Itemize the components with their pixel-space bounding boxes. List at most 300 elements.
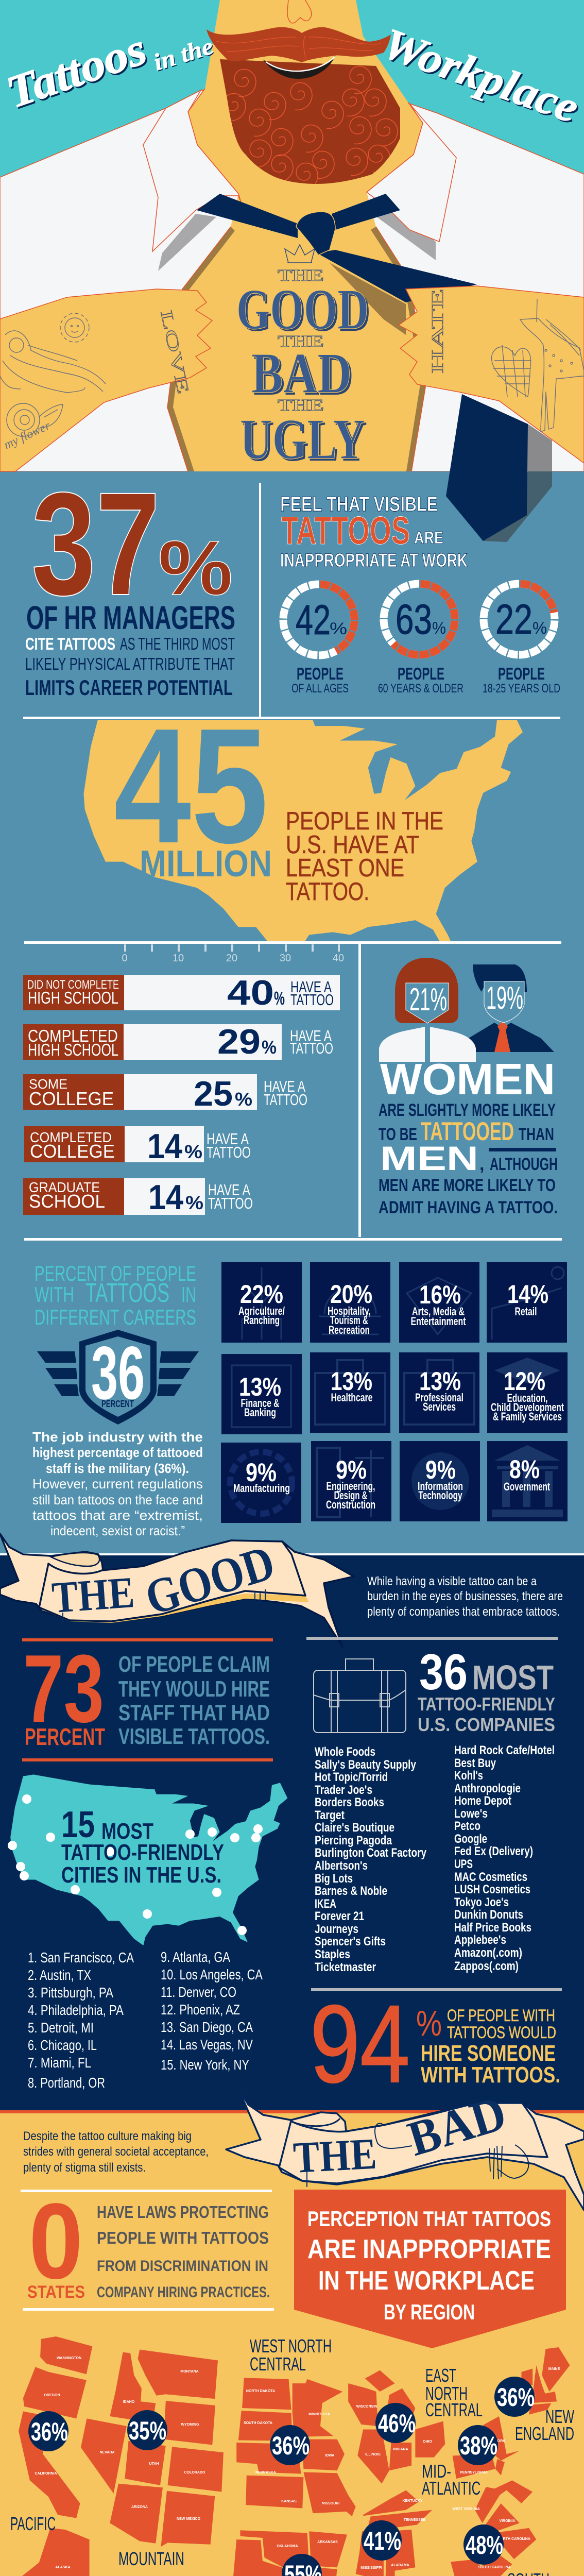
list: companies column 2: Dunkin Donuts xyxy=(454,1908,523,1922)
tile: education: 12% xyxy=(504,1367,545,1396)
state names: COLORADO xyxy=(184,2471,205,2475)
region labels: CENTRAL xyxy=(425,2399,483,2420)
list: companies column 1: IKEA xyxy=(315,1897,336,1911)
right arm xyxy=(399,286,584,463)
map: 15 tattoo friendly cities xyxy=(8,1774,287,1945)
list: cities: 7. Miami, FL xyxy=(28,2055,91,2071)
donut: 63 percent: 60 YEARS & OLDER xyxy=(378,682,463,696)
bar: did not complete high school: DID NOT COMPLETE xyxy=(27,978,119,992)
tile: engineering: Engineering, xyxy=(327,1480,375,1493)
tattoo: mermaid xyxy=(0,331,106,393)
state names: NEVADA xyxy=(99,2451,115,2454)
region labels: MID- xyxy=(422,2461,451,2482)
state names: MAINE xyxy=(548,2367,560,2371)
list: cities: 1. San Francisco, CA xyxy=(28,1950,134,1965)
bar: completed high school xyxy=(23,1022,333,1061)
chest tattoo: the good the bad the ugly: BAD xyxy=(253,344,354,408)
list: cities: 14. Las Vegas, NV xyxy=(161,2037,253,2053)
chest tattoo: the good the bad the ugly: BAD xyxy=(251,342,352,405)
list: companies column 1: Target xyxy=(315,1808,345,1822)
state names: WYOMING xyxy=(181,2423,199,2427)
icon: military shield 36 percent xyxy=(37,1330,199,1425)
banner: perception by region: BY REGION xyxy=(384,2300,475,2324)
tile: information technology: 9% xyxy=(425,1455,456,1484)
nose xyxy=(287,0,312,23)
list: companies column 1: Borders Books xyxy=(315,1795,384,1809)
state names: WEST VIRGINIA xyxy=(452,2507,480,2511)
tattoo: brick heart xyxy=(492,345,531,397)
bar: completed college: COLLEGE xyxy=(30,1141,115,1162)
heading: 36 most tattoo friendly companies xyxy=(418,1643,555,1735)
title: in the xyxy=(151,33,217,77)
text: the bad intro: plenty of stigma still exists. xyxy=(23,2161,146,2175)
map: 45 million people: MILLION xyxy=(140,843,272,885)
stat: 0 states xyxy=(27,2181,270,2302)
tie lower blade xyxy=(446,394,528,541)
donut: 22 percent: 22 xyxy=(495,596,533,643)
stat: 73 percent: STAFF THAT HAD xyxy=(118,1700,270,1725)
tile: information technology xyxy=(400,1441,480,1521)
banner: the bad xyxy=(226,2085,584,2210)
donut: 63 percent: PEOPLE xyxy=(398,664,444,683)
region labels: WEST NORTH xyxy=(250,2335,332,2357)
list: cities: 3. Pittsburgh, PA xyxy=(28,1985,113,2001)
tile: engineering: Design & xyxy=(334,1489,368,1502)
bar: did not complete high school: HAVE A xyxy=(290,978,332,996)
tile: professional services xyxy=(399,1352,479,1433)
stat: 37 percent of HR managers xyxy=(25,462,235,700)
region labels: MOUNTAIN xyxy=(118,2548,184,2569)
tile: healthcare: Healthcare xyxy=(331,1391,373,1404)
tie xyxy=(197,194,477,302)
tile: arts: 16% xyxy=(419,1280,461,1309)
stat: 0 states: COMPANY HIRING PRACTICES. xyxy=(97,2284,270,2301)
list: companies column 1: Burlington Coat Factory xyxy=(315,1846,427,1860)
tile: government: 8% xyxy=(509,1455,540,1484)
donut: 63 percent xyxy=(378,584,463,696)
face and neck xyxy=(167,0,426,471)
state names: OREGON xyxy=(44,2394,60,2397)
stat: 94 percent: % xyxy=(416,2003,442,2043)
text: women vs men: , xyxy=(479,1155,484,1174)
bar: completed college: 14 xyxy=(147,1127,182,1166)
list: cities: 15. New York, NY xyxy=(161,2057,249,2073)
list: companies column 2: Anthropologie xyxy=(454,1782,521,1795)
state names: ILLINOIS xyxy=(365,2453,381,2456)
heading: feel that visible tattoos: INAPPROPRIATE AT WORK xyxy=(280,550,468,571)
list: cities: 11. Denver, CO xyxy=(161,1984,236,2000)
list: companies column 1: Whole Foods xyxy=(315,1745,375,1759)
state names: IDAHO xyxy=(123,2400,135,2404)
list: companies column 1: Sally's Beauty Supply xyxy=(315,1758,417,1772)
tile: engineering: Construction xyxy=(326,1498,375,1511)
tile: retail xyxy=(487,1262,567,1343)
grid: career tiles xyxy=(221,1262,568,1523)
chart axis: 0 xyxy=(122,953,128,964)
banner: perception by region: IN THE WORKPLACE xyxy=(318,2266,535,2296)
icon: man 19 percent: 19% xyxy=(486,980,523,1016)
list: companies column 1: Forever 21 xyxy=(315,1909,364,1923)
stat: 73 percent: 73 xyxy=(23,1635,104,1742)
map: states by region xyxy=(0,2335,574,2576)
heading: percent in careers: PERCENT OF PEOPLE xyxy=(35,1261,196,1285)
state names xyxy=(35,2357,560,2576)
list: cities: 10. Los Angeles, CA xyxy=(161,1967,263,1982)
tile: government xyxy=(487,1441,568,1521)
bar: graduate school: TATTOO xyxy=(208,1194,253,1212)
illustration: tattooed man xyxy=(0,0,584,542)
tile: engineering xyxy=(311,1441,391,1521)
stat: 37 percent of HR managers: LIKELY PHYSICAL ATTRIBUTE THAT xyxy=(25,654,235,673)
tile: manufacturing xyxy=(221,1443,301,1523)
text: military paragraph: still ban tattoos on the face and xyxy=(32,1492,203,1507)
list: companies column 2: Best Buy xyxy=(454,1756,496,1770)
state names: PENNSYLVANIA xyxy=(460,2471,488,2475)
city dots xyxy=(8,1794,263,1935)
text: the good intro xyxy=(367,1574,563,1619)
background: top sky xyxy=(0,0,584,216)
title: in the xyxy=(150,32,216,76)
text: military paragraph: tattoos that are “extremist, xyxy=(32,1507,203,1523)
donut: 42 percent: 42 xyxy=(296,597,331,643)
bar: some college xyxy=(23,1074,307,1113)
tile: manufacturing: Manufacturing xyxy=(233,1482,290,1495)
state names: SOUTH CAROLINA xyxy=(478,2566,511,2569)
bar: some college: 25 xyxy=(194,1074,233,1113)
map: 15 tattoo friendly cities: 15 xyxy=(61,1804,95,1845)
region percentages xyxy=(31,2383,535,2576)
bar: completed college: HAVE A xyxy=(207,1130,249,1148)
list: cities: 12. Phoenix, AZ xyxy=(161,2002,240,2018)
list: companies column 1: Hot Topic/Torrid xyxy=(315,1770,388,1784)
list: companies column 1: Claire's Boutique xyxy=(315,1821,394,1835)
stat: 37 percent of HR managers: 37 xyxy=(31,462,160,626)
panel: the good background xyxy=(0,1554,584,2111)
chest tattoo: the good the bad the ugly: THE xyxy=(278,396,324,414)
stat: 0 states: HAVE LAWS PROTECTING xyxy=(97,2202,269,2222)
tile: information technology: Technology xyxy=(418,1489,462,1502)
bar: completed college: COMPLETED xyxy=(30,1129,112,1145)
list: companies column 1: Journeys xyxy=(315,1922,358,1936)
state names: WASHINGTON xyxy=(57,2357,81,2360)
state names: CALIFORNIA xyxy=(35,2472,57,2476)
stat: 73 percent: PERCENT xyxy=(25,1723,105,1750)
region circles xyxy=(28,2377,535,2576)
tile: retail: 14% xyxy=(507,1280,548,1309)
chest tattoo: the good the bad the ugly: UGLY xyxy=(240,408,365,471)
text: the good intro: While having a visible tattoo can be a xyxy=(367,1574,537,1588)
bar: completed college: TATTOO xyxy=(207,1143,251,1161)
stat: 37 percent of HR managers: % xyxy=(158,524,233,611)
region percentages: 38% xyxy=(460,2431,497,2460)
map: 45 million people: TATTOO. xyxy=(286,878,369,906)
state names: INDIANA xyxy=(393,2448,408,2451)
list: cities: 8. Portland, OR xyxy=(28,2075,105,2091)
state names: IOWA xyxy=(325,2454,334,2458)
tattoo: LOVE: LOVE xyxy=(157,309,193,396)
tile: professional services: Professional xyxy=(415,1391,463,1404)
bar: completed high school: TATTOO xyxy=(290,1039,333,1057)
state names: ARIZONA xyxy=(131,2505,148,2509)
bar: completed high school: HIGH SCHOOL xyxy=(28,1040,118,1059)
title: Workplace xyxy=(377,19,584,132)
list: companies column 2: Lowe's xyxy=(454,1807,488,1821)
list: companies column 2: UPS xyxy=(454,1857,473,1871)
map: 15 tattoo friendly cities: MOST xyxy=(101,1819,153,1844)
state names: ALABAMA xyxy=(391,2564,409,2567)
region percentages: 36% xyxy=(272,2431,310,2460)
bar: completed high school: % xyxy=(262,1037,277,1058)
region percentages: 35% xyxy=(129,2416,166,2445)
text: military paragraph: However, current regulations xyxy=(32,1476,203,1492)
bar: did not complete high school: 40 xyxy=(227,973,274,1012)
stat: 0 states: 0 xyxy=(29,2181,83,2301)
state names: OKLAHOMA xyxy=(277,2545,298,2548)
bar: graduate school: HAVE A xyxy=(208,1181,250,1199)
mouth xyxy=(263,56,335,79)
heading: 36 most tattoo friendly companies: TATTOO-FRIENDLY xyxy=(418,1693,555,1715)
tile: hospitality: Tourism & xyxy=(330,1314,368,1327)
bar: completed college xyxy=(24,1126,251,1166)
map: 45 million people: LEAST ONE xyxy=(286,854,404,882)
title: Tattoos xyxy=(1,24,152,118)
beard curls xyxy=(224,66,398,190)
state names: TENNESSEE xyxy=(404,2518,426,2522)
tie knot xyxy=(296,212,335,255)
map: 15 tattoo friendly cities: TATTOO-FRIENDLY xyxy=(61,1840,224,1865)
text: women vs men: WOMEN xyxy=(380,1055,555,1104)
stat: 37 percent of HR managers: OF HR MANAGERS xyxy=(26,599,235,636)
list: companies column 2: Home Depot xyxy=(454,1794,511,1808)
tile: agriculture: Agriculture/ xyxy=(238,1304,285,1317)
bar: some college: HAVE A xyxy=(264,1077,305,1095)
tile: education xyxy=(487,1352,568,1433)
list: companies column 1: Ticketmaster xyxy=(315,1960,376,1974)
tile: hospitality: Hospitality, xyxy=(328,1304,371,1317)
icon: military shield 36 percent: PERCENT xyxy=(101,1399,134,1409)
list: companies column 2: Amazon(.com) xyxy=(454,1946,522,1960)
tile: agriculture: Ranching xyxy=(244,1314,280,1327)
list: companies column 2: Petco xyxy=(454,1819,480,1833)
bar: some college: % xyxy=(235,1089,252,1110)
bar: some college: TATTOO xyxy=(264,1091,307,1109)
region labels: CENTRAL xyxy=(250,2353,306,2375)
text: military paragraph: highest percentage of tattooed xyxy=(32,1445,203,1460)
chest tattoo: the good the bad the ugly: GOOD xyxy=(238,280,371,344)
text: the bad intro xyxy=(23,2129,209,2175)
bar: some college: SOME xyxy=(29,1076,67,1092)
stat: 94 percent: 94 xyxy=(310,1982,410,2106)
stat: 73 percent: VISIBLE TATTOOS. xyxy=(118,1724,270,1749)
chart axis: 30 xyxy=(280,953,291,964)
bar: did not complete high school: HIGH SCHOOL xyxy=(28,988,118,1007)
collar left xyxy=(143,90,242,251)
bar: graduate school: % xyxy=(185,1192,203,1213)
tile: hospitality xyxy=(310,1262,390,1343)
heading: percent in careers: TATTOOS xyxy=(85,1278,169,1308)
chart axis xyxy=(122,944,344,964)
chart axis: 10 xyxy=(173,953,184,964)
list: companies column 2: Google xyxy=(454,1832,487,1846)
state shapes xyxy=(0,2336,570,2576)
region labels: EAST xyxy=(425,2365,456,2386)
state names: ARKANSAS xyxy=(317,2540,338,2544)
stat: 94 percent: OF PEOPLE WITH xyxy=(447,2006,555,2025)
region labels xyxy=(10,2335,574,2576)
chart axis: 20 xyxy=(226,953,237,964)
torso shading xyxy=(167,227,426,471)
tile: agriculture: 22% xyxy=(240,1280,283,1309)
text: women vs men: TO BE xyxy=(379,1125,417,1144)
donut: 42 percent xyxy=(283,584,354,696)
list: companies column 2: Half Price Books xyxy=(454,1921,531,1935)
heading: percent in careers: DIFFERENT CAREERS xyxy=(35,1305,196,1329)
map: 45 million people: PEOPLE IN THE xyxy=(286,807,443,835)
banner: the good xyxy=(0,1534,354,1647)
tattoo: crown xyxy=(285,245,315,263)
tile: education: Education, xyxy=(507,1392,548,1404)
list: companies column 1: Barnes & Noble xyxy=(315,1884,387,1898)
chest tattoo: the good the bad the ugly: UGLY xyxy=(242,410,367,473)
text: women vs men: TATTOOED xyxy=(421,1117,514,1146)
bar: graduate school: 14 xyxy=(148,1178,183,1217)
panel: blue stats background xyxy=(0,471,584,1554)
bar: graduate school: SCHOOL xyxy=(29,1191,105,1212)
region percentages: 41% xyxy=(364,2527,401,2555)
bar: did not complete high school: TATTOO xyxy=(290,991,334,1009)
list: companies column 1: Big Lots xyxy=(315,1872,353,1886)
map: 45 million people: 45 xyxy=(114,694,268,877)
list: companies column 2: LUSH Cosmetics xyxy=(454,1883,530,1896)
chest tattoo: the good the bad the ugly: THE xyxy=(278,332,324,350)
list: cities: 5. Detroit, MI xyxy=(28,2020,94,2036)
tile: engineering: 9% xyxy=(336,1455,367,1484)
bar: completed high school: COMPLETED xyxy=(28,1026,118,1045)
state names: MINNESOTA xyxy=(308,2413,330,2416)
heading: percent in careers: IN xyxy=(181,1282,196,1307)
tattoo: rose xyxy=(7,403,63,436)
region percentages: 36% xyxy=(31,2417,68,2446)
heading: feel that visible tattoos: ARE xyxy=(414,528,443,547)
tile: government: Government xyxy=(504,1480,550,1493)
region labels: NORTH xyxy=(425,2383,468,2404)
donut: 63 percent: 63 xyxy=(396,596,432,643)
tattoo: unicorn xyxy=(520,299,584,432)
donut: 22 percent xyxy=(483,584,560,696)
list: cities: 13. San Diego, CA xyxy=(161,2019,253,2035)
tile: hospitality: Recreation xyxy=(329,1324,370,1336)
list: companies column 1: Albertson's xyxy=(315,1859,368,1873)
tie lower blade shadow xyxy=(483,424,552,542)
list: companies column 2: Fed Ex (Delivery) xyxy=(454,1844,533,1858)
list: companies column 1: Trader Joe's xyxy=(315,1783,372,1797)
stat: 94 percent: TATTOOS WOULD xyxy=(447,2023,556,2042)
donut: 22 percent: PEOPLE xyxy=(498,664,545,683)
beard xyxy=(220,59,400,184)
banner: the bad: THE xyxy=(292,2129,378,2182)
list: companies column 2: Tokyo Joe's xyxy=(454,1895,509,1909)
tile: finance: 13% xyxy=(239,1372,281,1401)
list: cities: 2. Austin, TX xyxy=(28,1967,91,1983)
tile: information technology: Information xyxy=(418,1480,463,1493)
heading: 36 most tattoo friendly companies: 36 xyxy=(419,1643,468,1700)
state names: KANSAS xyxy=(281,2500,297,2503)
bar: completed college: % xyxy=(184,1141,202,1162)
list: companies column 1: Staples xyxy=(315,1947,350,1961)
tattoo: HATE: HATE xyxy=(428,289,446,374)
text: the bad intro: strides with general societal acceptance, xyxy=(23,2145,209,2159)
mustache xyxy=(207,27,391,62)
donut: 42 percent: % xyxy=(330,619,347,638)
state names: SOUTH DAKOTA xyxy=(244,2421,272,2425)
chest tattoo: the good the bad the ugly: GOOD xyxy=(236,278,369,342)
tile: agriculture xyxy=(221,1262,302,1343)
tile: professional services: Services xyxy=(423,1400,456,1413)
state names: NEBRASKA xyxy=(255,2471,276,2475)
state names: KENTUCKY xyxy=(403,2499,423,2503)
title: Workplace xyxy=(379,21,584,134)
neck outline xyxy=(188,89,423,194)
heading: feel that visible tattoos xyxy=(280,493,468,571)
background: shirt xyxy=(0,90,584,471)
stat: 37 percent of HR managers: CITE TATTOOS xyxy=(25,634,115,653)
state names: VIRGINIA xyxy=(499,2519,516,2523)
state names: UTAH xyxy=(149,2462,159,2466)
bar: completed high school: HAVE A xyxy=(290,1027,332,1045)
tile: retail: Retail xyxy=(515,1305,537,1318)
region percentages: 36% xyxy=(497,2383,535,2412)
tie shadow on torso xyxy=(330,263,406,335)
stat: 37 percent of HR managers: AS THE THIRD MOST xyxy=(120,634,235,653)
state names: ALASKA xyxy=(55,2566,71,2569)
bar: did not complete high school: % xyxy=(274,988,285,1009)
state names: NORTH DAKOTA xyxy=(246,2389,275,2393)
region labels: ATLANTIC xyxy=(422,2478,480,2499)
list: cities: 6. Chicago, IL xyxy=(28,2037,97,2053)
tile: arts: Arts, Media & xyxy=(412,1305,465,1318)
list: companies column 2: Zappos(.com) xyxy=(454,1959,519,1973)
icon: military shield 36 percent: 36 xyxy=(91,1331,145,1415)
list: companies column 2: Kohl's xyxy=(454,1769,483,1783)
donut: 63 percent: % xyxy=(432,619,446,637)
state names: NEW MEXICO xyxy=(177,2517,200,2521)
region percentages: 48% xyxy=(466,2531,503,2560)
tile: arts: Entertainment xyxy=(411,1315,466,1328)
list: companies column 2: Applebee's xyxy=(454,1933,506,1947)
stat: 0 states: FROM DISCRIMINATION IN xyxy=(97,2258,268,2275)
bar: did not complete high school xyxy=(23,973,340,1012)
text: women vs men: MEN xyxy=(380,1139,478,1177)
map: 15 tattoo friendly cities: CITIES IN THE U.S. xyxy=(61,1862,221,1888)
text: women vs men xyxy=(379,1055,558,1217)
icon: briefcase xyxy=(314,1659,406,1733)
tattoo: my flower: my flower xyxy=(2,419,53,452)
map: 45 million people xyxy=(83,720,523,941)
banner: perception by region xyxy=(294,2190,566,2348)
bar: graduate school xyxy=(23,1178,253,1217)
heading: percent in careers: WITH xyxy=(35,1282,74,1307)
bar: completed high school: 29 xyxy=(217,1022,261,1061)
chest tattoo: the good the bad the ugly xyxy=(236,266,371,473)
text: military paragraph: indecent, sexist or racist.” xyxy=(50,1523,185,1538)
collar shadows xyxy=(158,210,436,271)
text: women vs men: THAN xyxy=(519,1125,554,1144)
tie lower blade shadow over panel xyxy=(483,471,552,542)
stat: 0 states: PEOPLE WITH TATTOOS xyxy=(97,2228,269,2247)
panel: the bad background xyxy=(0,2111,584,2576)
tile: healthcare: 13% xyxy=(331,1367,372,1396)
collar right xyxy=(367,104,456,242)
